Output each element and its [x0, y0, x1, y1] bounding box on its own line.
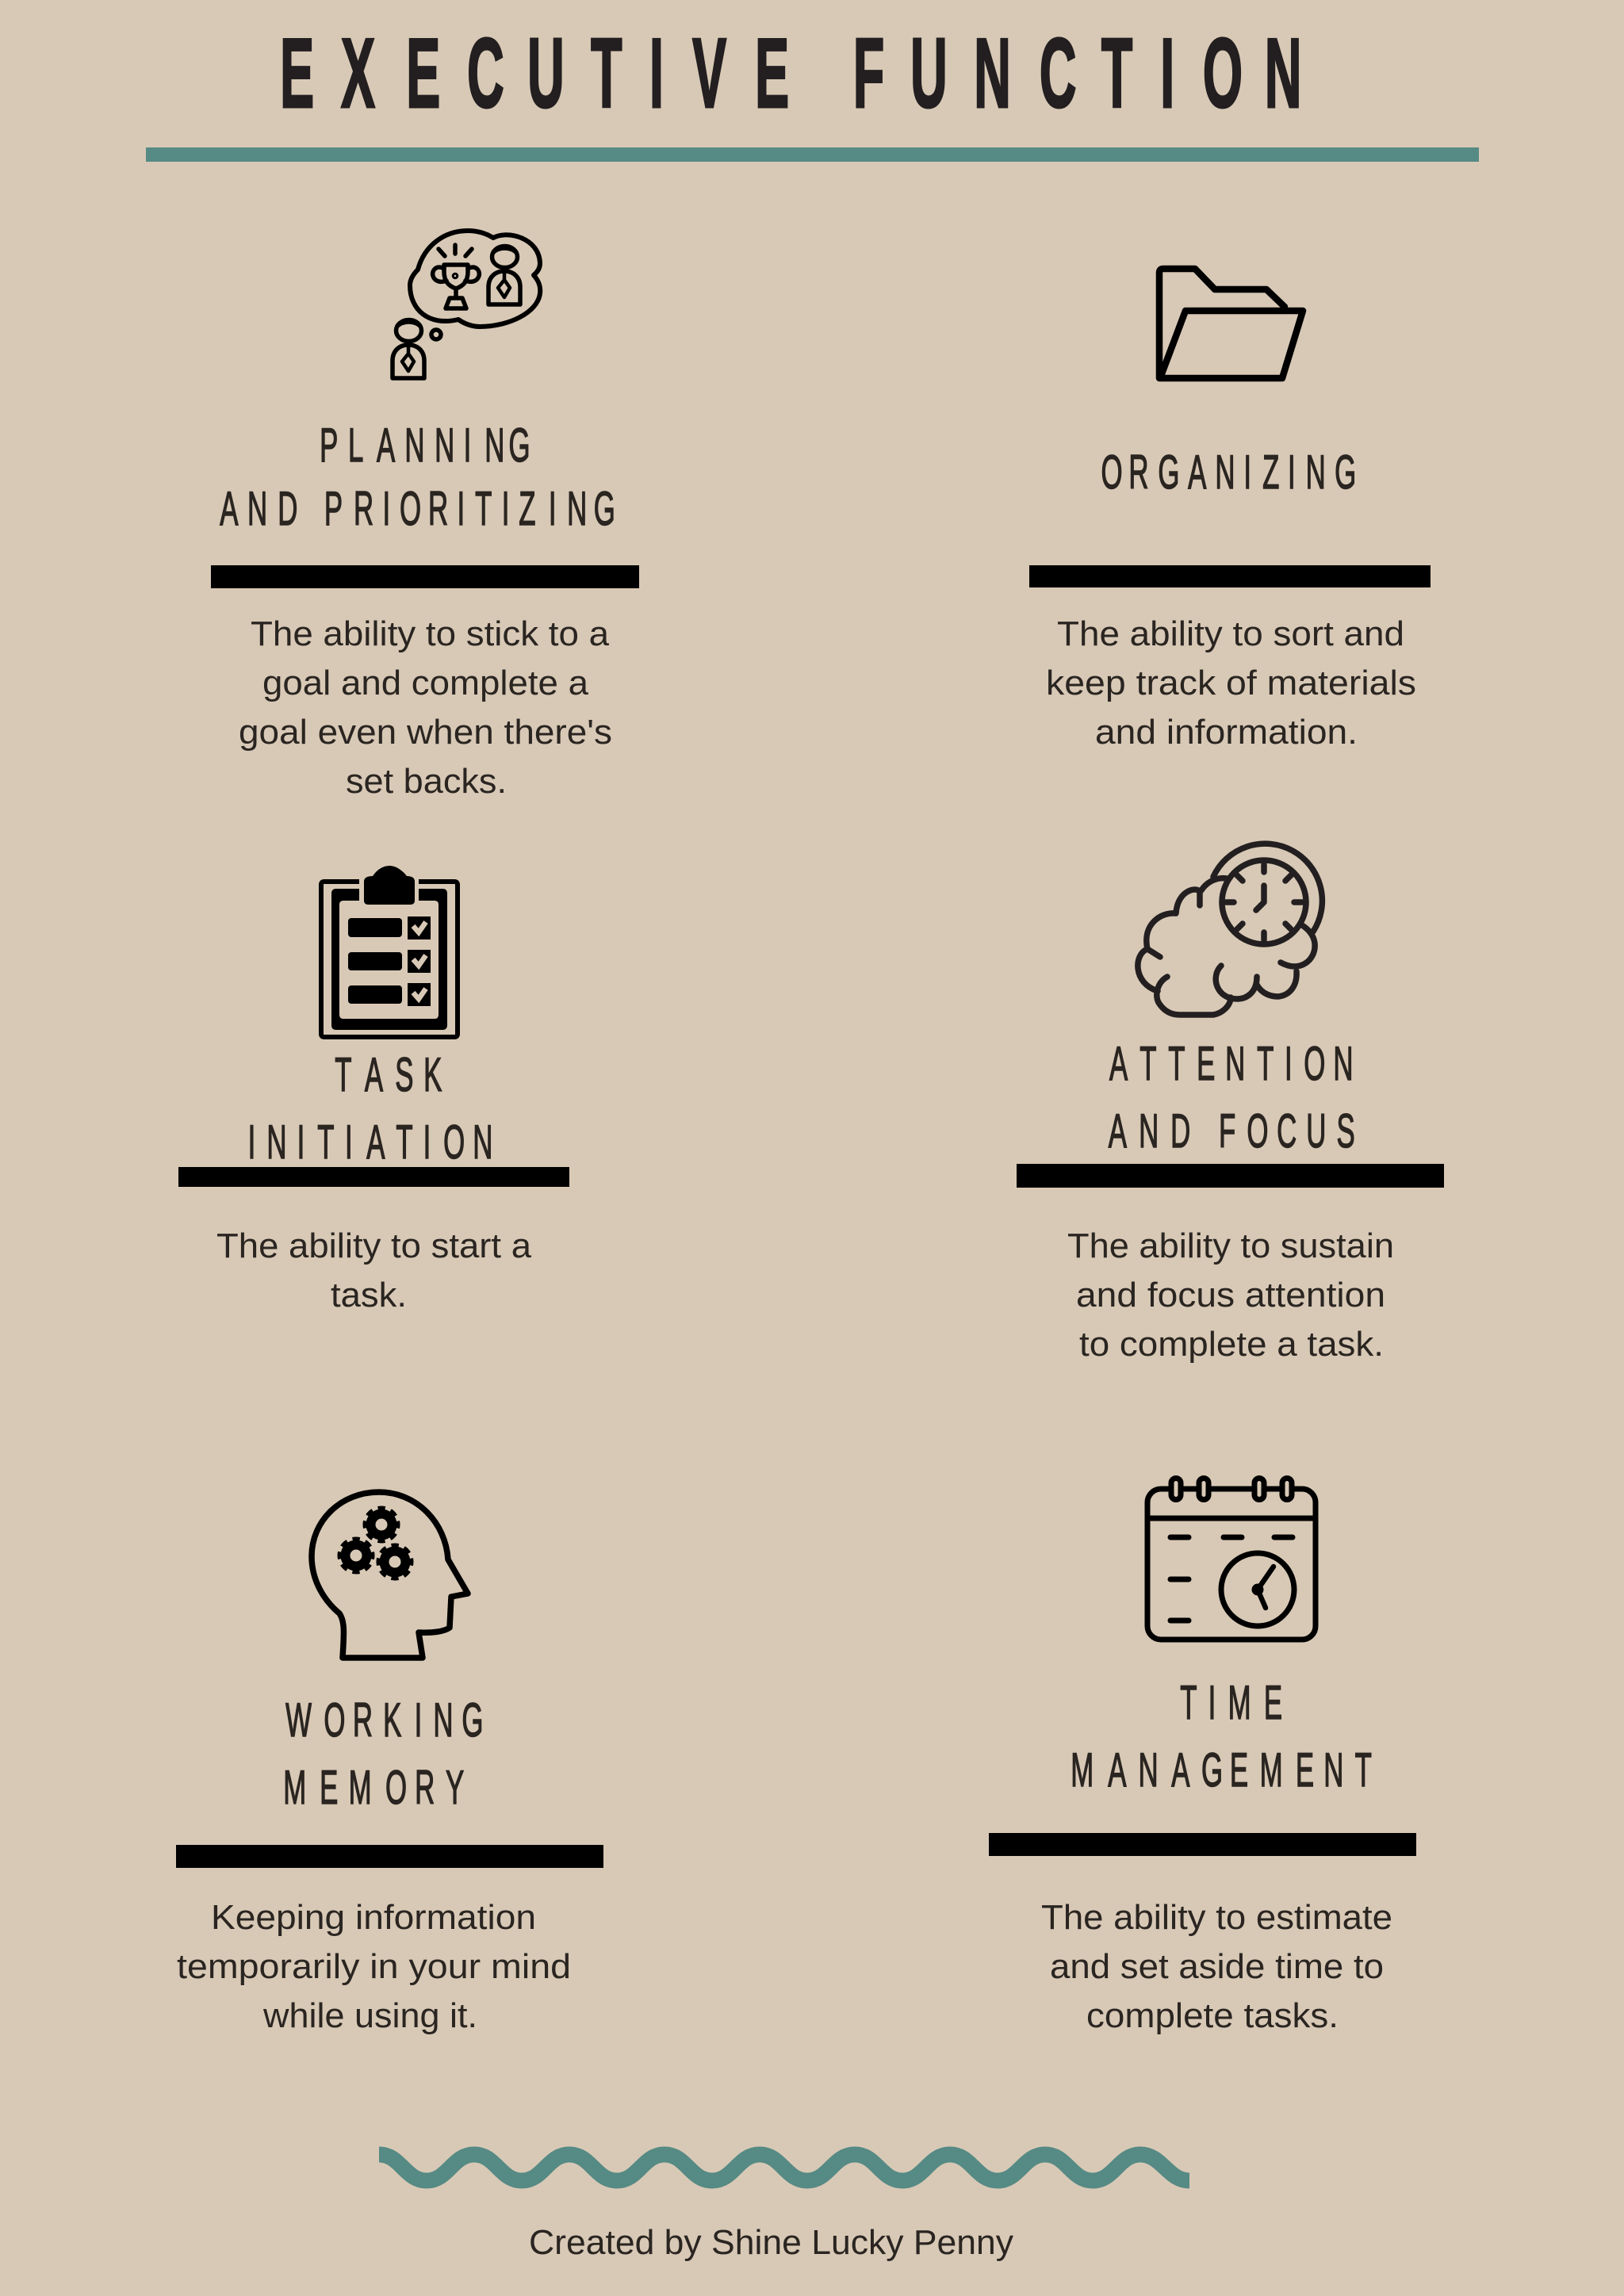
- icon: head with gears: [312, 1492, 468, 1658]
- label: task initiation: [248, 1049, 492, 1169]
- description: The ability to start a: [216, 1226, 532, 1265]
- title: EXECUTIVE FUNCTION: [280, 18, 1301, 128]
- description: while using it.: [262, 1996, 477, 2035]
- description: The ability to estimate: [1041, 1898, 1392, 1937]
- label: planning and prioritizing: PLANNING: [320, 419, 530, 472]
- description: temporarily in your mind: [177, 1947, 571, 1986]
- description: [216, 1226, 532, 1314]
- label: planning and prioritizing: [220, 419, 615, 535]
- panel: attention and focus: [1017, 844, 1444, 1364]
- description: and information.: [1095, 713, 1358, 752]
- label: attention and focus: AND FOCUS: [1109, 1105, 1355, 1158]
- label: working memory: WORKING: [285, 1694, 483, 1747]
- label: working memory: [283, 1694, 483, 1814]
- label: attention and focus: ATTENTION: [1109, 1038, 1354, 1090]
- panel: working memory: [176, 1492, 603, 2035]
- label: task initiation: INITIATION: [248, 1116, 492, 1169]
- description: The ability to stick to a: [251, 614, 610, 653]
- divider bar: [1029, 565, 1431, 587]
- description: and focus attention: [1076, 1276, 1385, 1314]
- title underline bar: [146, 147, 1479, 162]
- label: attention and focus: [1109, 1038, 1355, 1158]
- description: [1067, 1226, 1394, 1364]
- description: [177, 1898, 571, 2035]
- divider bar: [989, 1833, 1416, 1856]
- description: The ability to sort and: [1057, 614, 1404, 653]
- label: organizing: ORGANIZING: [1101, 446, 1356, 499]
- description: task.: [331, 1276, 407, 1314]
- icon: brain with clock: [1138, 844, 1322, 1015]
- label: time management: MANAGEMENT: [1071, 1744, 1372, 1797]
- icon: clipboard checklist: [321, 866, 458, 1037]
- panel: planning and prioritizing: [211, 231, 639, 801]
- description: [1046, 614, 1416, 752]
- description: goal and complete a: [262, 664, 589, 702]
- panel: organizing: [1029, 269, 1431, 752]
- description: and set aside time to: [1050, 1947, 1384, 1986]
- label: planning and prioritizing: AND PRIORITIZING: [220, 483, 615, 535]
- description: [239, 614, 612, 801]
- wave decoration: [379, 2155, 1189, 2180]
- label: time management: TIME: [1180, 1677, 1282, 1729]
- credit line: Created by Shine Lucky Penny: [529, 2223, 1013, 2262]
- divider bar: [178, 1167, 569, 1187]
- label: time management: [1071, 1677, 1372, 1797]
- label: working memory: MEMORY: [283, 1762, 464, 1814]
- divider bar: [1017, 1164, 1444, 1188]
- description: set backs.: [346, 762, 507, 801]
- description: [1041, 1898, 1392, 2035]
- icon: folder: [1159, 269, 1303, 378]
- divider bar: [176, 1845, 603, 1868]
- icon: thought bubble with trophy and people: [393, 231, 540, 378]
- divider bar: [211, 565, 639, 588]
- description: keep track of materials: [1046, 664, 1416, 702]
- description: to complete a task.: [1079, 1325, 1384, 1364]
- description: complete tasks.: [1086, 1996, 1339, 2035]
- description: goal even when there's: [239, 713, 612, 752]
- panel: task initiation: [178, 866, 569, 1314]
- description: The ability to sustain: [1067, 1226, 1394, 1265]
- panel: time management: [989, 1478, 1416, 2035]
- icon: calendar with clock: [1147, 1478, 1316, 1640]
- description: Keeping information: [211, 1898, 536, 1937]
- label: task initiation: TASK: [335, 1049, 442, 1101]
